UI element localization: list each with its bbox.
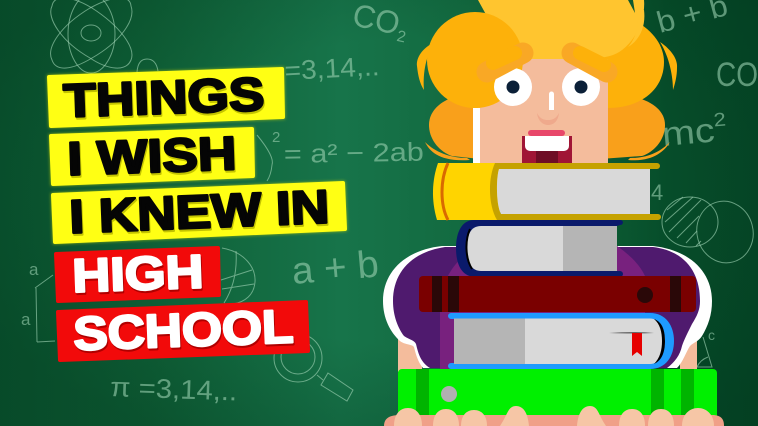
chalk formula: square expansion: = a² − 2ab xyxy=(284,137,424,169)
icon: magnifier xyxy=(274,334,353,401)
nose xyxy=(537,92,559,125)
body: purple lobes xyxy=(393,247,700,368)
title line: HIGH xyxy=(54,244,221,304)
icon: cube sketch: a xyxy=(29,260,39,279)
right eyebrow xyxy=(572,53,607,72)
icon: venn diagram xyxy=(662,195,758,269)
chalk formula: mc squared: mc xyxy=(660,112,709,154)
hair: right wisp xyxy=(660,42,677,90)
label glow xyxy=(47,67,347,244)
book: dark red xyxy=(419,276,696,312)
title line: THINGS: THINGS xyxy=(63,69,266,129)
mouth xyxy=(522,130,572,163)
hair: highlight xyxy=(628,10,644,47)
hair xyxy=(417,0,677,160)
icon: globe sketch xyxy=(221,248,255,304)
body: purple centre xyxy=(440,246,645,369)
title line: I WISH xyxy=(49,126,255,187)
title line: I KNEW IN: I KNEW IN xyxy=(68,180,330,243)
title line: HIGH: HIGH xyxy=(72,246,205,304)
title banner xyxy=(47,67,347,362)
right eye xyxy=(562,68,600,106)
chalk cone: c xyxy=(708,327,715,343)
title line: SCHOOL: SCHOOL xyxy=(73,301,295,362)
palm xyxy=(384,415,724,426)
chalk formula: pi top: =3,14,.. xyxy=(284,51,380,86)
book: yellow top xyxy=(433,163,661,220)
icon: cube sketch: a xyxy=(21,310,31,329)
hair: lower right wisp xyxy=(628,142,670,160)
face xyxy=(478,59,608,164)
head xyxy=(427,12,608,164)
chalk formula: mc squared: 2 xyxy=(713,109,727,131)
body: white outline xyxy=(383,246,712,368)
book: green xyxy=(398,369,717,426)
hair: left puff xyxy=(427,12,523,108)
book stack xyxy=(398,163,717,426)
chalk letter: A: 4 xyxy=(651,180,663,205)
title line: I WISH: I WISH xyxy=(67,128,238,187)
chalk formula: pi bottom: π =3,14,.. xyxy=(110,372,238,406)
hair: lower left puff xyxy=(429,93,480,159)
title line: THINGS: THINGS xyxy=(62,67,265,127)
fingers xyxy=(394,406,714,426)
title line: HIGH: HIGH xyxy=(71,244,204,302)
chalk formula: square expansion: 2 xyxy=(272,129,280,146)
hands xyxy=(384,406,724,426)
face: white edge xyxy=(473,108,480,164)
title line: I KNEW IN: I KNEW IN xyxy=(69,182,331,245)
chalk cone xyxy=(697,327,715,367)
arms xyxy=(398,338,697,372)
title line: SCHOOL: SCHOOL xyxy=(72,299,294,360)
book: navy xyxy=(456,220,623,277)
hair: lower right puff xyxy=(600,93,665,159)
chalk formula: CO2: 2 xyxy=(395,28,407,46)
left eye xyxy=(494,68,532,106)
hair: top xyxy=(478,0,644,59)
chalk formula: a plus b: a + b xyxy=(290,244,380,293)
book: blue xyxy=(448,313,674,369)
chalk formula: square expansion xyxy=(257,129,424,181)
hair: left wisp xyxy=(417,42,435,90)
hair: lower left wisp xyxy=(425,142,470,160)
character xyxy=(383,0,724,426)
title line: I WISH: I WISH xyxy=(66,126,237,185)
hair: right puff xyxy=(590,10,664,108)
icon: atom xyxy=(51,0,158,73)
icon: cube sketch xyxy=(21,260,55,342)
left eyebrow xyxy=(487,53,523,72)
icon: bookmark xyxy=(632,333,642,356)
